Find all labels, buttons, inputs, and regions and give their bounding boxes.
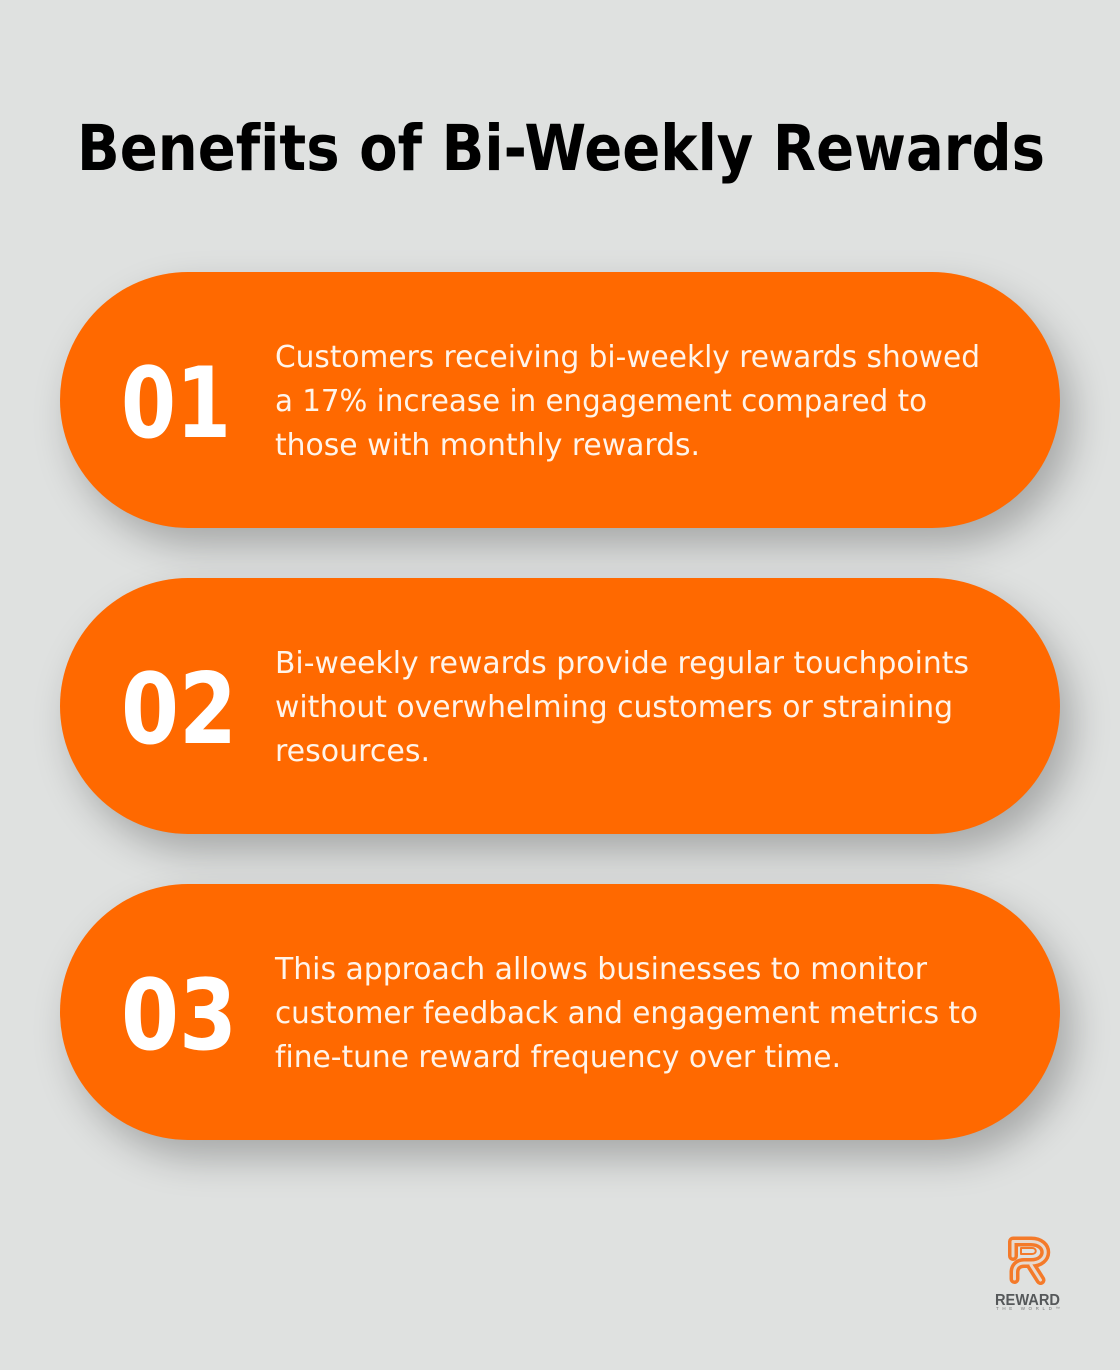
benefit 3 content (121, 952, 978, 1075)
number 01: 01 (121, 347, 231, 461)
panel: benefit 3 background (60, 884, 1060, 1140)
text: benefit 2: Bi-weekly rewards provide regular touchpoints (275, 646, 969, 681)
text: THE WORLD: THE WORLD™ (996, 1306, 1060, 1311)
text: benefit 1 (275, 340, 980, 463)
text: benefit 2: without overwhelming customers or straining (275, 690, 953, 725)
panel: benefit 1 background (60, 272, 1060, 528)
text: benefit 3: This approach allows businesses to monitor (274, 952, 928, 987)
number 02: 02 (121, 653, 237, 767)
benefit 1 content (121, 340, 980, 463)
text: benefit 3: customer feedback and engagement metrics to (275, 996, 978, 1031)
benefit 2 content (121, 646, 969, 769)
text: benefit 1: those with monthly rewards. (275, 428, 700, 463)
text: benefit 2: resources. (275, 734, 430, 769)
icon: R mark (1013, 1242, 1045, 1280)
text: benefit 1: Customers receiving bi-weekly rewards showed (275, 340, 980, 375)
number 03: 03 (121, 959, 237, 1073)
text: benefit 3 (274, 952, 978, 1075)
text: benefit 3: fine-tune reward frequency over time. (275, 1040, 841, 1075)
text: REWARD: REWARD (995, 1292, 1060, 1309)
logo: Reward the World (995, 1242, 1060, 1311)
text: benefit 2 (275, 646, 969, 769)
panel: benefit 2 background (60, 578, 1060, 834)
text: benefit 1: a 17% increase in engagement compared to (275, 384, 927, 419)
